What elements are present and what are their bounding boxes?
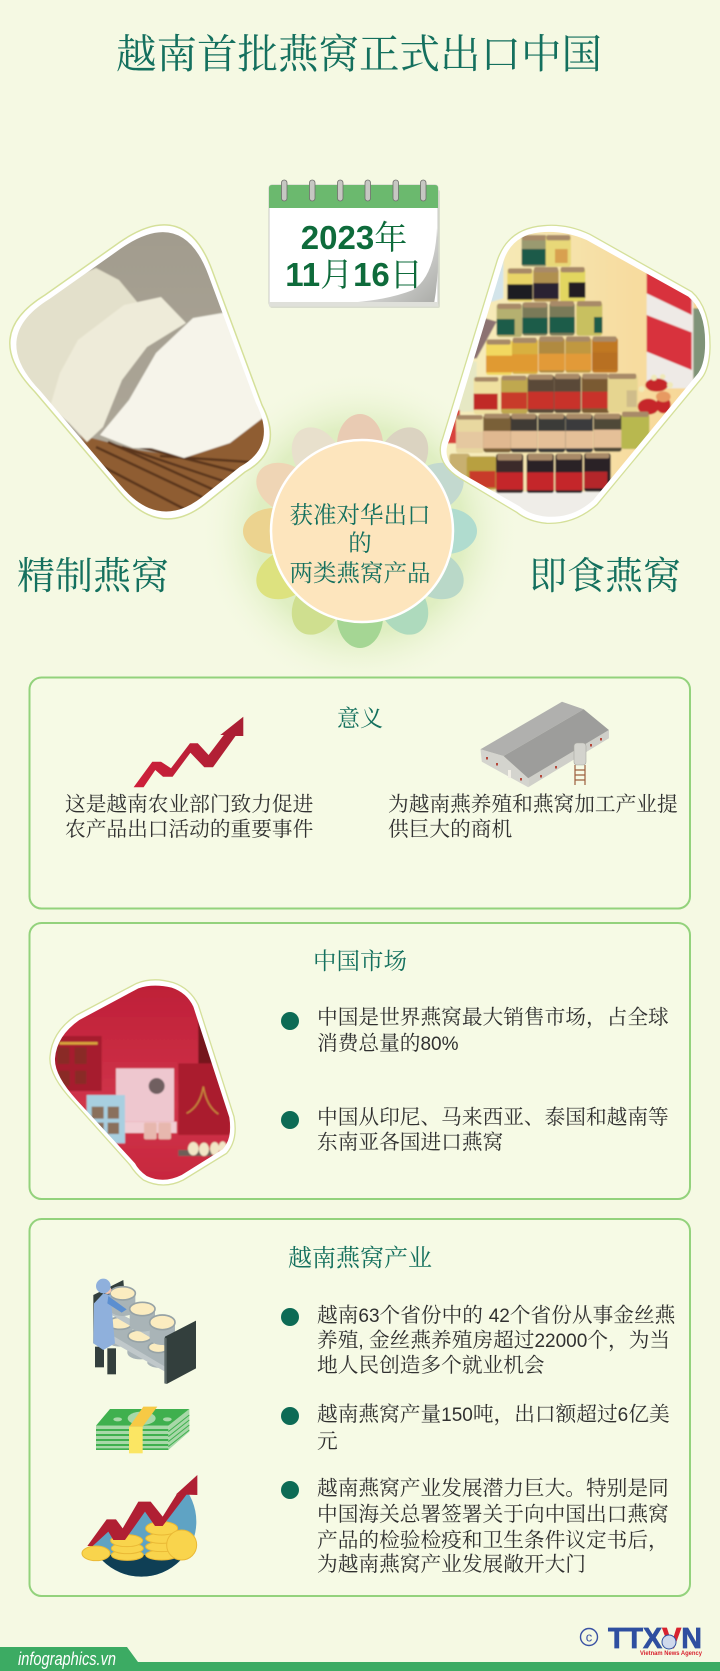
photo: red gift boxes: [49, 979, 236, 1186]
jars row 4: [486, 336, 618, 375]
bullet: farming provinces: 养殖, 金丝燕养殖房超过22000个，为当: [317, 1329, 670, 1352]
text: significance left: [65, 793, 314, 841]
photo: refined bird's nest: [9, 224, 272, 520]
logo: copyright and TTXVN: Vietnam News Agency: [640, 1650, 702, 1657]
bullet: China market share: [281, 1006, 669, 1055]
icon: worker with nest shelves: [93, 1279, 196, 1384]
text: significance right: 为越南燕养殖和燕窝加工产业提: [388, 793, 678, 816]
bullet: farming provinces: [281, 1304, 676, 1377]
flower diagram: two product types: 的: [348, 530, 372, 556]
footer bar with site name: [0, 1647, 720, 1671]
panel: significance: [30, 678, 690, 908]
heading: China market: 中国市场: [313, 948, 407, 974]
bullet: farming provinces: 地人民创造多个就业机会: [317, 1354, 545, 1377]
flower diagram: two product types: 获准对华出口: [290, 502, 430, 528]
text: significance left: 这是越南农业部门致力促进: [65, 793, 314, 816]
calendar page curl: [358, 228, 438, 304]
bullet: China market share: 消费总量的80%: [317, 1032, 459, 1055]
text: significance right: 供巨大的商机: [388, 818, 512, 841]
heading: Vietnam bird's nest industry: 越南燕窝产业: [288, 1245, 432, 1272]
bullet: China market share: 中国是世界燕窝最大销售市场，占全球: [317, 1006, 669, 1029]
flower diagram: two product types: [200, 371, 520, 691]
label: refined bird's nest: 精制燕窝: [17, 556, 169, 598]
bullet: output and export: 元: [317, 1430, 338, 1453]
bullet: potential: 中国海关总署签署关于向中国出口燕窝: [317, 1503, 669, 1526]
jars row 1: [522, 235, 571, 267]
bullet: import sources: 中国从印尼、马来西亚、泰国和越南等: [317, 1106, 669, 1129]
calendar date: [269, 180, 440, 308]
label: ready-to-eat bird's nest: 即食燕窝: [529, 556, 681, 598]
heading: significance: 意义: [337, 705, 383, 731]
flower diagram: two product types: 两类燕窝产品: [290, 560, 430, 586]
photo: ready-to-eat bird's nest jars: [440, 225, 713, 525]
text: significance right: [388, 793, 678, 841]
jars row 2: [507, 267, 585, 302]
bullet: farming provinces: 越南63个省份中的 42个省份从事金丝燕: [317, 1304, 676, 1327]
title: 越南首批燕窝正式出口中国: [116, 31, 602, 77]
icon: stack of banknotes: [96, 1407, 189, 1453]
panel: China market: [30, 923, 690, 1199]
panel: Vietnam bird's nest industry: [30, 1219, 690, 1596]
bullet: import sources: [281, 1106, 669, 1154]
jars row 3: [497, 301, 602, 337]
bullet: import sources: 东南亚各国进口燕窝: [317, 1131, 503, 1154]
calendar date: 2023年: [301, 219, 407, 256]
logo: copyright and TTXVN: c: [586, 1630, 593, 1644]
jars row 5: [474, 374, 638, 414]
footer bar with site name: infographics.vn: [18, 1649, 116, 1669]
text: significance left: 农产品出口活动的重要事件: [65, 818, 314, 841]
bullet: potential: 越南燕窝产业发展潜力巨大。特别是同: [317, 1477, 669, 1500]
bullet: output and export: [281, 1403, 670, 1453]
bullet: potential: [281, 1477, 669, 1576]
logo: copyright and TTXVN: TTXVN: [608, 1623, 702, 1655]
bullet: potential: 为越南燕窝产业发展敞开大门: [317, 1553, 586, 1576]
bullet: potential: 产品的检验检疫和卫生条件议定书后，: [317, 1529, 669, 1552]
jars row 6: [456, 412, 649, 453]
icon: swiftlet farm building: [480, 702, 609, 787]
calendar date: 11月16日: [285, 256, 423, 293]
jars row 7: [449, 453, 611, 493]
icon: growth chart with coins: [82, 1475, 203, 1582]
icon: rising red arrow: [134, 717, 243, 787]
bullet: output and export: 越南燕窝产量150吨，出口额超过6亿美: [317, 1403, 670, 1426]
